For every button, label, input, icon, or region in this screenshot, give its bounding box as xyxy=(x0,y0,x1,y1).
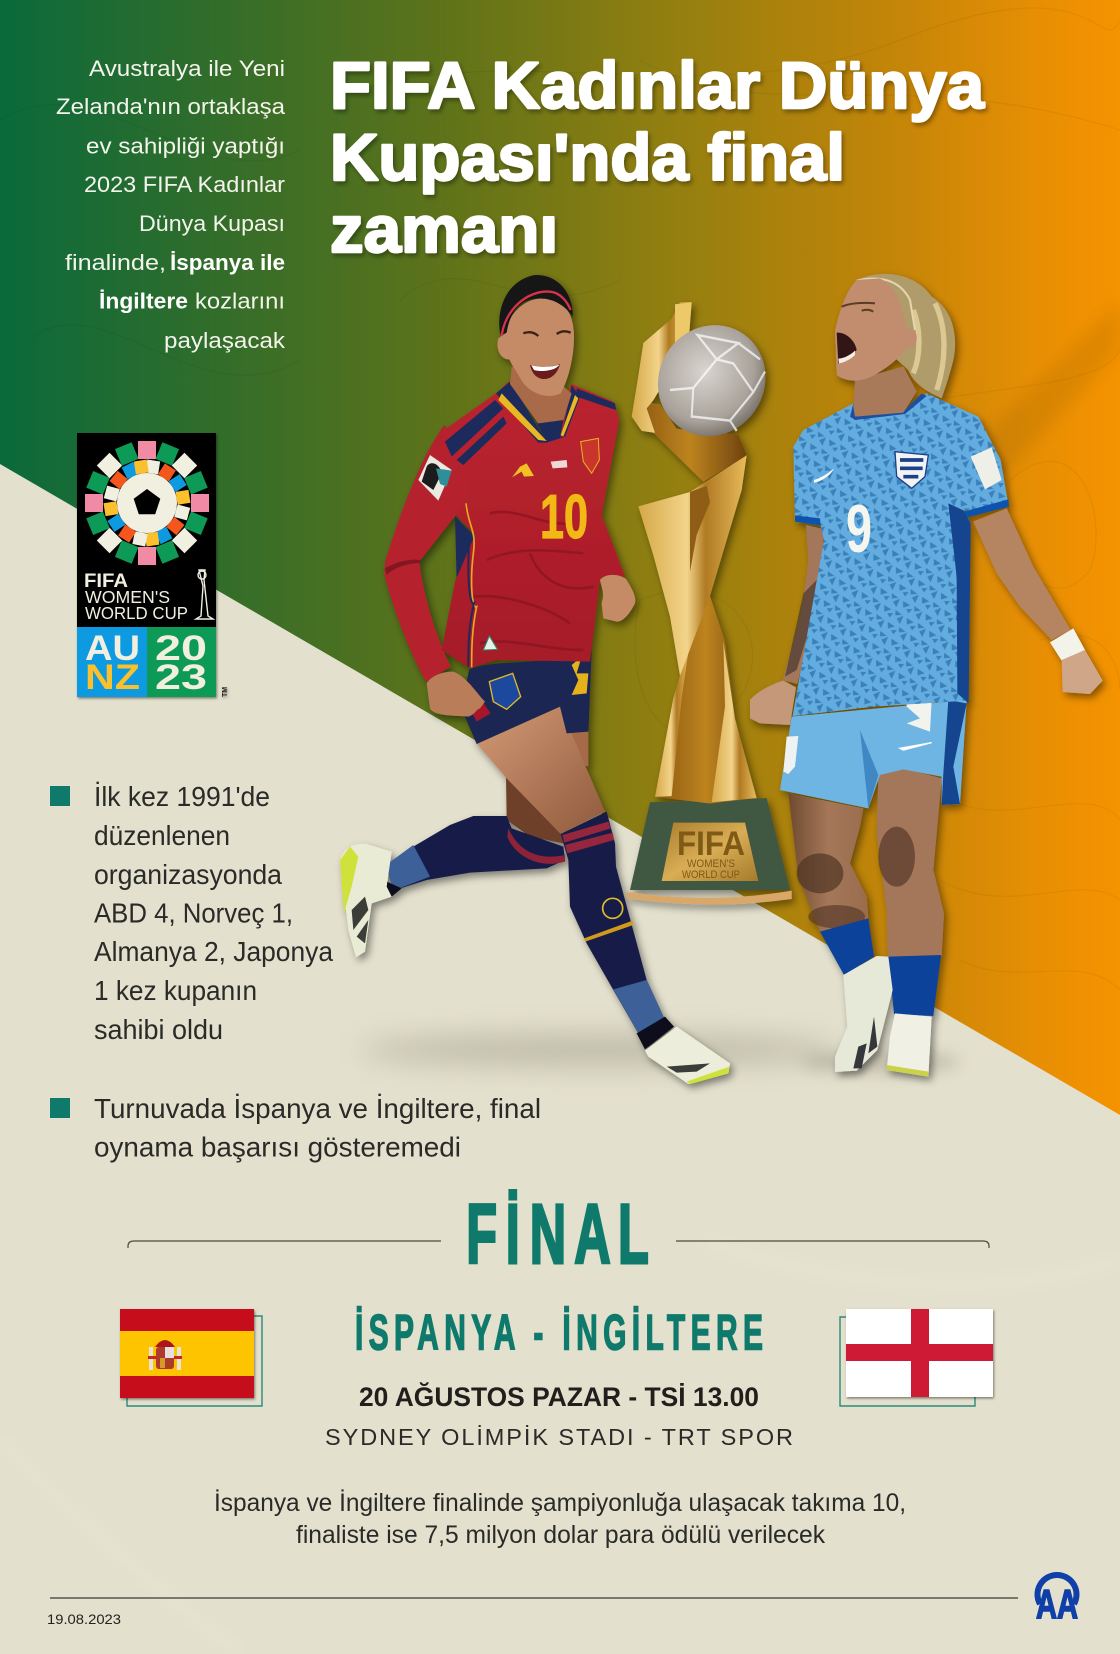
legs and boots xyxy=(780,700,967,1077)
heading: FİNAL xyxy=(128,1187,989,1281)
logo hosts and year: 20 xyxy=(155,629,207,668)
match title: İSPANYA - İNGİLTERE xyxy=(355,1305,763,1360)
intro text block xyxy=(56,56,286,353)
title: zamanı xyxy=(330,192,558,266)
icon: AA agency logo xyxy=(1036,1575,1078,1627)
flag: Spain xyxy=(120,1309,262,1406)
intro text block: Dünya Kupası xyxy=(139,211,285,236)
trophy xyxy=(627,302,792,904)
player: England xyxy=(750,274,1103,1077)
logo: FIFA Women's World Cup 2023 xyxy=(77,433,229,697)
ball xyxy=(651,315,773,446)
prize note: finaliste ise 7,5 milyon dolar para ödülü verilecek xyxy=(296,1521,825,1549)
venue: SYDNEY OLİMPİK STADI - TRT SPOR xyxy=(325,1424,793,1450)
bullet 2: Turnuvada İspanya ve İngiltere, final xyxy=(94,1093,541,1124)
bullet 1: sahibi oldu xyxy=(94,1014,223,1045)
bullet list xyxy=(50,781,541,1162)
prize note: İspanya ve İngiltere finalinde şampiyonluğa ulaşacak takıma 10, xyxy=(214,1488,906,1517)
bullet 1: Almanya 2, Japonya xyxy=(94,936,334,967)
golden ribbon xyxy=(655,596,757,803)
logo hosts and year xyxy=(85,629,207,697)
intro text block: finalinde, xyxy=(65,250,166,275)
plaque text: WOMEN'S xyxy=(687,858,735,870)
arm, torso, head xyxy=(384,275,635,717)
jersey numbers: 9 xyxy=(846,491,872,567)
logo: FIFA Women's World Cup 2023: TM xyxy=(222,687,229,697)
date: 19.08.2023 xyxy=(47,1611,121,1627)
bullet 1: İlk kez 1991'de xyxy=(94,781,270,812)
player: Spain xyxy=(340,275,730,1084)
intro text block: İspanya ile xyxy=(170,250,285,275)
intro text block: Zelanda'nın ortaklaşa xyxy=(56,94,286,119)
title xyxy=(330,48,985,266)
jersey number: 10 xyxy=(540,483,588,552)
bullet 2 xyxy=(50,1093,541,1162)
bullet 1: ABD 4, Norveç 1, xyxy=(94,898,293,928)
bullet 1: düzenlenen xyxy=(94,820,230,851)
logo wordmark xyxy=(84,570,213,623)
shorts xyxy=(460,650,592,744)
heading: FİNAL: FİNAL xyxy=(466,1187,649,1281)
plaque text xyxy=(677,825,745,881)
background: gradient band xyxy=(0,0,1120,1115)
bullet 1: 1 kez kupanın xyxy=(94,975,257,1006)
intro text block: kozlarını xyxy=(195,288,285,314)
logo wordmark: FIFA xyxy=(84,571,128,592)
bullet 1: organizasyonda xyxy=(94,859,283,890)
intro text block: İngiltere xyxy=(99,288,188,314)
logo wordmark: WOMEN'S xyxy=(85,587,170,607)
background: paper panel xyxy=(0,464,1120,1654)
bullet 1 xyxy=(50,781,334,1045)
arms, shirt, head xyxy=(750,274,1103,725)
prize note xyxy=(214,1488,906,1549)
logo hosts and year: NZ xyxy=(85,658,140,697)
icon: AA agency logo: AA xyxy=(1036,1581,1078,1627)
logo hosts and year: 23 xyxy=(155,658,207,697)
plaque text: FIFA xyxy=(677,825,745,863)
icon: emblem outer squares xyxy=(85,441,209,565)
intro text block: ev sahipliği yaptığı xyxy=(86,134,285,158)
logo hosts and year: AU xyxy=(85,629,140,668)
footer rule xyxy=(50,1597,1018,1599)
title: Kupası'nda final xyxy=(330,120,845,194)
logo wordmark: WORLD CUP xyxy=(85,603,188,623)
legs and boots xyxy=(340,680,730,1084)
intro text block: paylaşacak xyxy=(164,328,286,353)
marble base xyxy=(630,798,790,890)
match date: 20 AĞUSTOS PAZAR - TSİ 13.00 xyxy=(359,1381,759,1412)
title: FIFA Kadınlar Dünya xyxy=(330,48,985,122)
intro text block: Avustralya ile Yeni xyxy=(89,56,285,81)
intro text block: 2023 FIFA Kadınlar xyxy=(84,172,286,197)
shorts xyxy=(780,700,967,808)
flag: England xyxy=(840,1309,993,1406)
bullet 2: oynama başarısı gösteremedi xyxy=(94,1132,461,1162)
plaque text: WORLD CUP xyxy=(682,869,740,881)
